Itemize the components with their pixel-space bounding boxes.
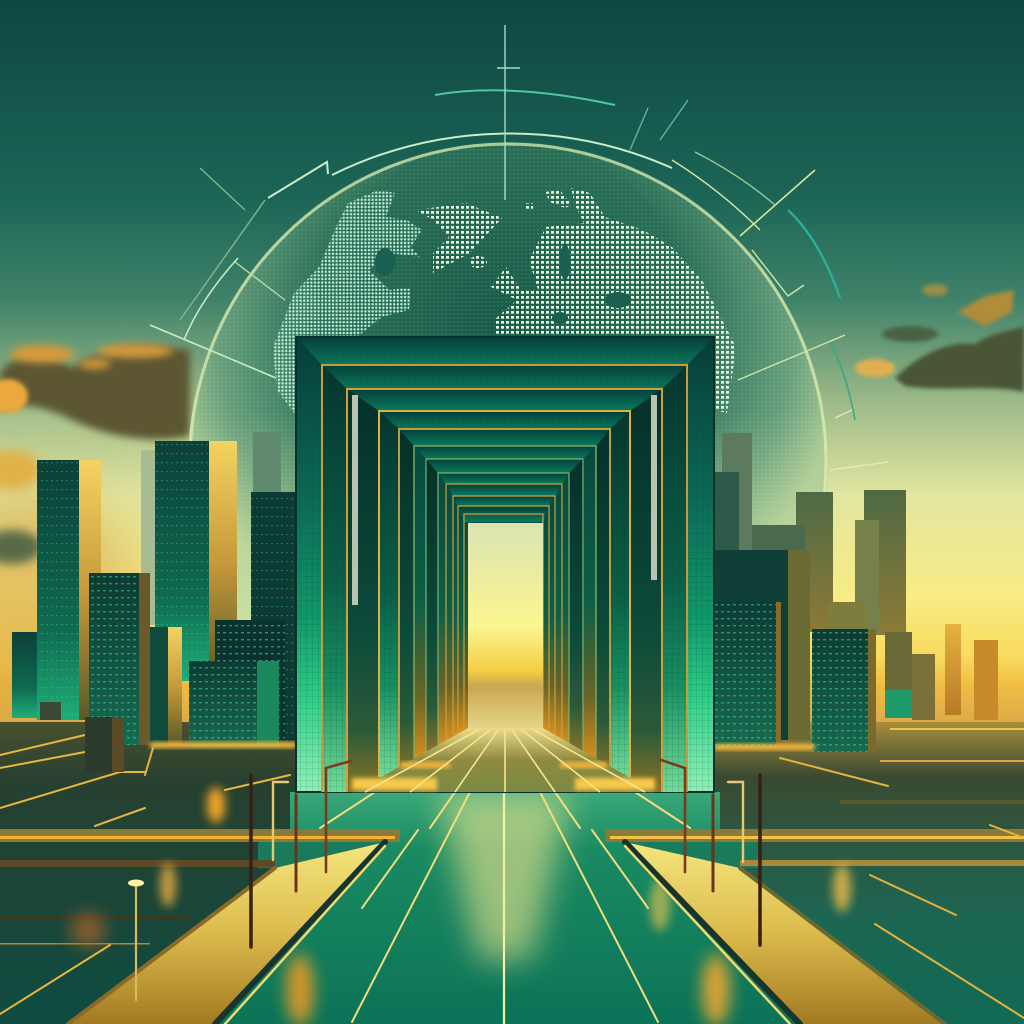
portal frame 8 <box>438 473 569 745</box>
portal frame 11 <box>458 506 549 732</box>
post 9 <box>728 782 743 862</box>
building: olive slab <box>714 472 739 562</box>
building: tall tower far left <box>37 460 101 720</box>
portal frame 1 <box>296 337 714 792</box>
sky background <box>0 0 1024 730</box>
road <box>215 792 800 1024</box>
building: front window block <box>714 602 781 745</box>
continent: northern island <box>416 203 502 273</box>
building: shoulder block <box>752 525 805 585</box>
skyline: right buildings <box>714 433 998 752</box>
portal floor lines <box>365 730 645 792</box>
lamp posts: left <box>128 761 351 1000</box>
globe <box>188 142 828 782</box>
building: main tower <box>155 441 237 681</box>
continent: polar fragment <box>545 190 572 208</box>
right teal apron <box>625 842 758 868</box>
skyline: left buildings <box>12 432 297 747</box>
portal frame 9 <box>446 484 562 740</box>
building: far gold tower <box>945 624 961 715</box>
left walkway <box>68 842 385 1024</box>
portal frame 2 <box>322 365 687 792</box>
continent: eastern landmass <box>491 188 736 413</box>
portal frame 5 <box>399 429 610 775</box>
floor glowing lines <box>0 735 1024 1024</box>
clouds: right <box>855 284 1024 392</box>
building: dark tower behind portal <box>251 492 297 742</box>
globe: inland seas <box>375 244 631 324</box>
clouds: left <box>0 344 190 564</box>
building: right tower <box>796 492 833 632</box>
portal: nested gateway frames <box>296 337 714 792</box>
post 7 <box>712 795 714 891</box>
continent: western landmass <box>273 190 422 413</box>
portal frame 3 <box>347 389 662 792</box>
floor bands and reflections <box>0 728 1024 1024</box>
building: window tower <box>89 573 150 745</box>
building: twin towers <box>855 490 906 635</box>
building: small block <box>40 702 61 720</box>
lamp posts: right <box>661 760 760 945</box>
post 2 <box>294 795 298 891</box>
portal frame 10 <box>453 496 555 735</box>
building: mid window block <box>215 620 285 740</box>
post 8 <box>661 760 685 872</box>
building: small top block <box>828 602 868 630</box>
right walkway <box>625 842 945 1024</box>
building: pale tower <box>141 450 157 625</box>
road glow <box>440 792 570 960</box>
post 4 <box>273 782 288 860</box>
building: gold side block <box>150 627 182 745</box>
portal frame 7 <box>426 459 583 752</box>
ground plane <box>0 722 1024 1024</box>
building: olive tower <box>722 433 752 558</box>
building: dark stepped block <box>714 550 810 740</box>
portal lit threshold <box>352 762 655 790</box>
building: front window block <box>189 661 279 747</box>
left teal apron <box>258 842 385 868</box>
portal inner floor <box>355 728 655 792</box>
post 1 <box>249 775 253 947</box>
HUD rings and lines around globe <box>150 25 888 470</box>
building: low blocks <box>885 632 935 720</box>
portal frame 4 <box>379 411 630 777</box>
post 3 <box>326 761 351 872</box>
portal opening with sky <box>468 523 543 729</box>
building: pale upper tower <box>253 432 281 497</box>
post 6 <box>758 775 762 945</box>
continent: small island <box>469 256 487 268</box>
post 5 <box>128 880 144 1000</box>
building: window block right <box>812 629 876 752</box>
building: far orange tower <box>974 640 998 720</box>
box kiosk <box>85 717 124 772</box>
building: short teal block <box>12 632 37 718</box>
portal frame 6 <box>414 446 596 760</box>
